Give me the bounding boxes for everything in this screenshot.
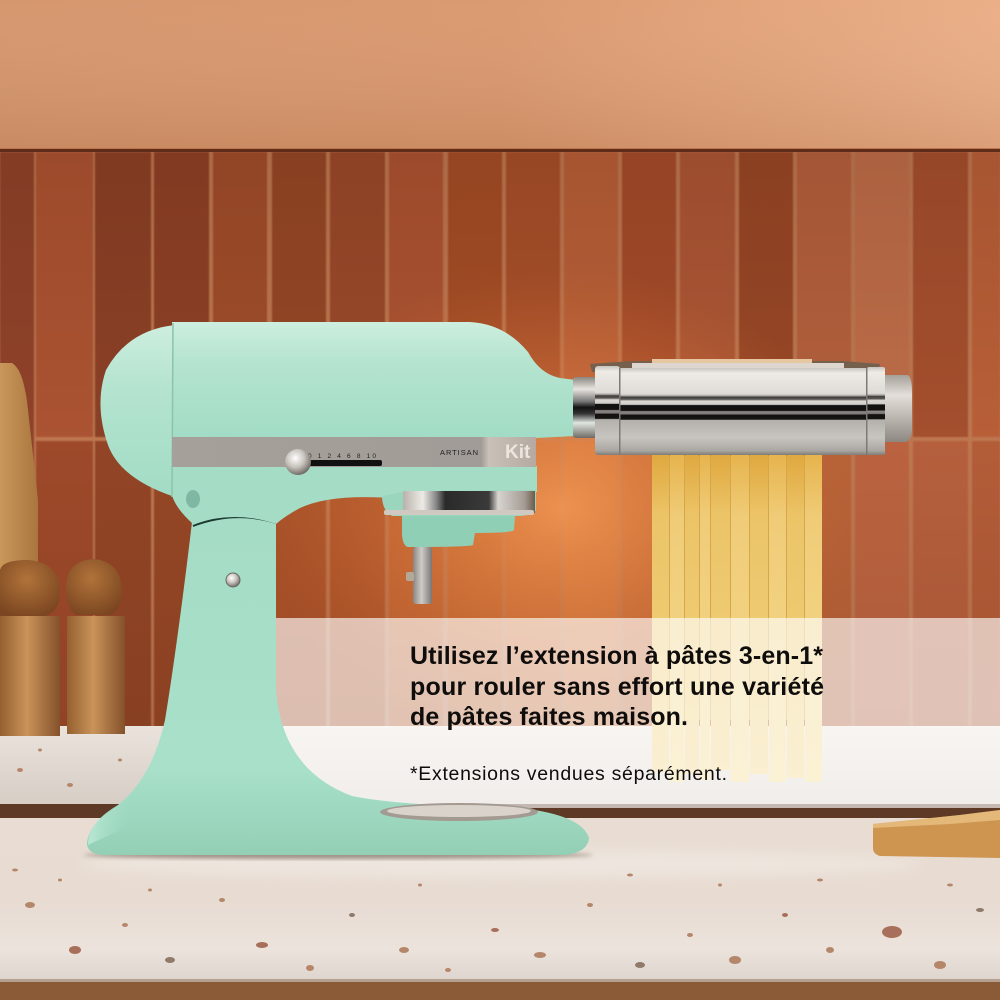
lower head casting	[171, 466, 537, 524]
mixer base and pedestal	[87, 517, 589, 855]
left ring edge	[619, 368, 620, 455]
speed scale: 0 1 2 4 6 8 10	[308, 453, 376, 460]
caption	[410, 642, 824, 785]
speed slot	[307, 460, 382, 466]
front counter	[0, 818, 1000, 1000]
contact shadow	[83, 851, 593, 859]
pedestal screw	[226, 573, 240, 587]
roller body	[600, 368, 885, 455]
headline	[410, 642, 824, 731]
wooden board, right	[873, 810, 1000, 858]
brand mark: Kit	[505, 442, 531, 463]
end ring left	[595, 366, 620, 455]
headline: pour rouler sans effort une variété	[410, 673, 824, 701]
counter speckles	[12, 748, 984, 972]
end ring right	[867, 367, 885, 455]
wooden cutting board, left	[0, 363, 38, 575]
pasta roller attachment	[573, 359, 912, 455]
attachment hub ring	[382, 490, 536, 516]
speed knob	[285, 449, 311, 475]
collar	[573, 377, 601, 438]
back counter	[0, 726, 1000, 820]
model name: ARTISAN	[440, 448, 478, 457]
end cap	[885, 375, 912, 442]
peppermill left	[0, 560, 60, 736]
beater mount	[402, 516, 515, 547]
top plate	[590, 361, 880, 372]
tilt lock hole	[186, 490, 200, 508]
peppermill right	[66, 559, 125, 734]
mixer head back dome	[100, 325, 175, 496]
hinge seam shadow	[193, 517, 276, 526]
mixer head	[172, 322, 576, 438]
tile wall	[0, 148, 1000, 730]
head seam	[172, 323, 173, 497]
headline: de pâtes faites maison.	[410, 703, 688, 731]
beater shaft	[406, 547, 432, 604]
stand mixer	[83, 322, 593, 859]
headline: Utilisez l’extension à pâtes 3-en-1*	[410, 642, 823, 670]
footnote: *Extensions vendues séparément.	[410, 763, 727, 785]
upper wall	[0, 0, 1000, 150]
translucent text band	[275, 618, 1000, 808]
right ring edge	[866, 368, 868, 455]
bowl plate	[380, 803, 538, 821]
silver trim band	[172, 437, 536, 475]
fresh pasta strips	[652, 450, 822, 782]
